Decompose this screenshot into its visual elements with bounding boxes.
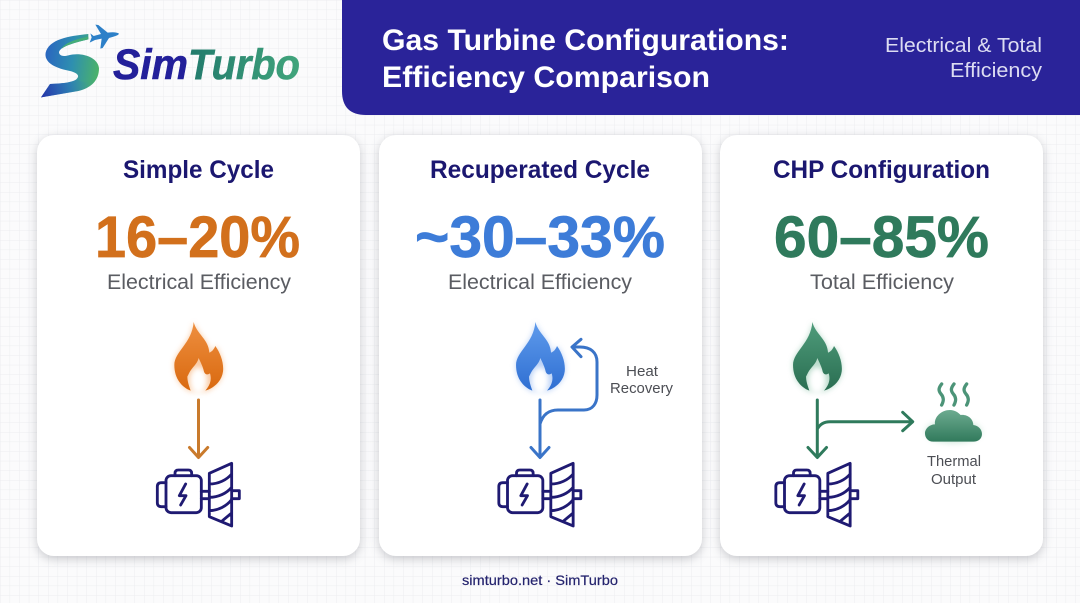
arrow: flame to turbine and thermal output	[808, 400, 913, 458]
logo wordmark: Turbo	[188, 41, 300, 89]
icon: motor and turbine	[499, 463, 581, 526]
header subtitle: Efficiency	[950, 60, 1042, 82]
title: Efficiency Comparison	[382, 61, 710, 94]
label: total efficiency: Total Efficiency	[810, 271, 955, 294]
icon: motor and turbine	[776, 463, 858, 526]
icon: green flame	[793, 322, 842, 394]
heading: recuperated cycle: Recuperated Cycle	[430, 156, 650, 184]
panel: recuperated cycle	[379, 135, 702, 556]
footer: simturbo.net · SimTurbo	[462, 572, 618, 588]
heading: CHP configuration: CHP Configuration	[773, 156, 990, 184]
arrow: flame to turbine	[190, 400, 208, 458]
panel: CHP configuration	[720, 135, 1043, 556]
icon: orange flame	[174, 322, 223, 394]
icon: thermal cloud with steam	[925, 384, 982, 443]
arrow: flame to turbine with heat recovery loop	[531, 339, 597, 458]
label: heat recovery: Heat	[626, 363, 659, 380]
icon: blue flame	[516, 322, 565, 394]
heading: simple cycle: Simple Cycle	[123, 156, 274, 184]
icon: S mark with airplane	[41, 25, 119, 97]
header subtitle: Electrical & Total	[885, 35, 1042, 57]
label: electrical efficiency: Electrical Efficiency	[107, 271, 292, 294]
stat: 60–85%: 60–85%	[774, 205, 989, 270]
label: heat recovery: Recovery	[610, 380, 673, 397]
logo: SimTurbo	[41, 25, 300, 97]
label: electrical efficiency: Electrical Efficiency	[448, 271, 633, 294]
panel: simple cycle	[37, 135, 360, 556]
stat: ~30–33%: ~30–33%	[415, 205, 665, 270]
stat: 16–20%: 16–20%	[95, 205, 300, 270]
icon: motor and turbine	[157, 463, 239, 526]
logo wordmark: Sim	[113, 41, 188, 89]
label: thermal output: Output	[931, 471, 977, 488]
title: Gas Turbine Configurations:	[382, 24, 789, 57]
header banner	[342, 0, 1080, 115]
label: thermal output: Thermal	[927, 453, 981, 470]
